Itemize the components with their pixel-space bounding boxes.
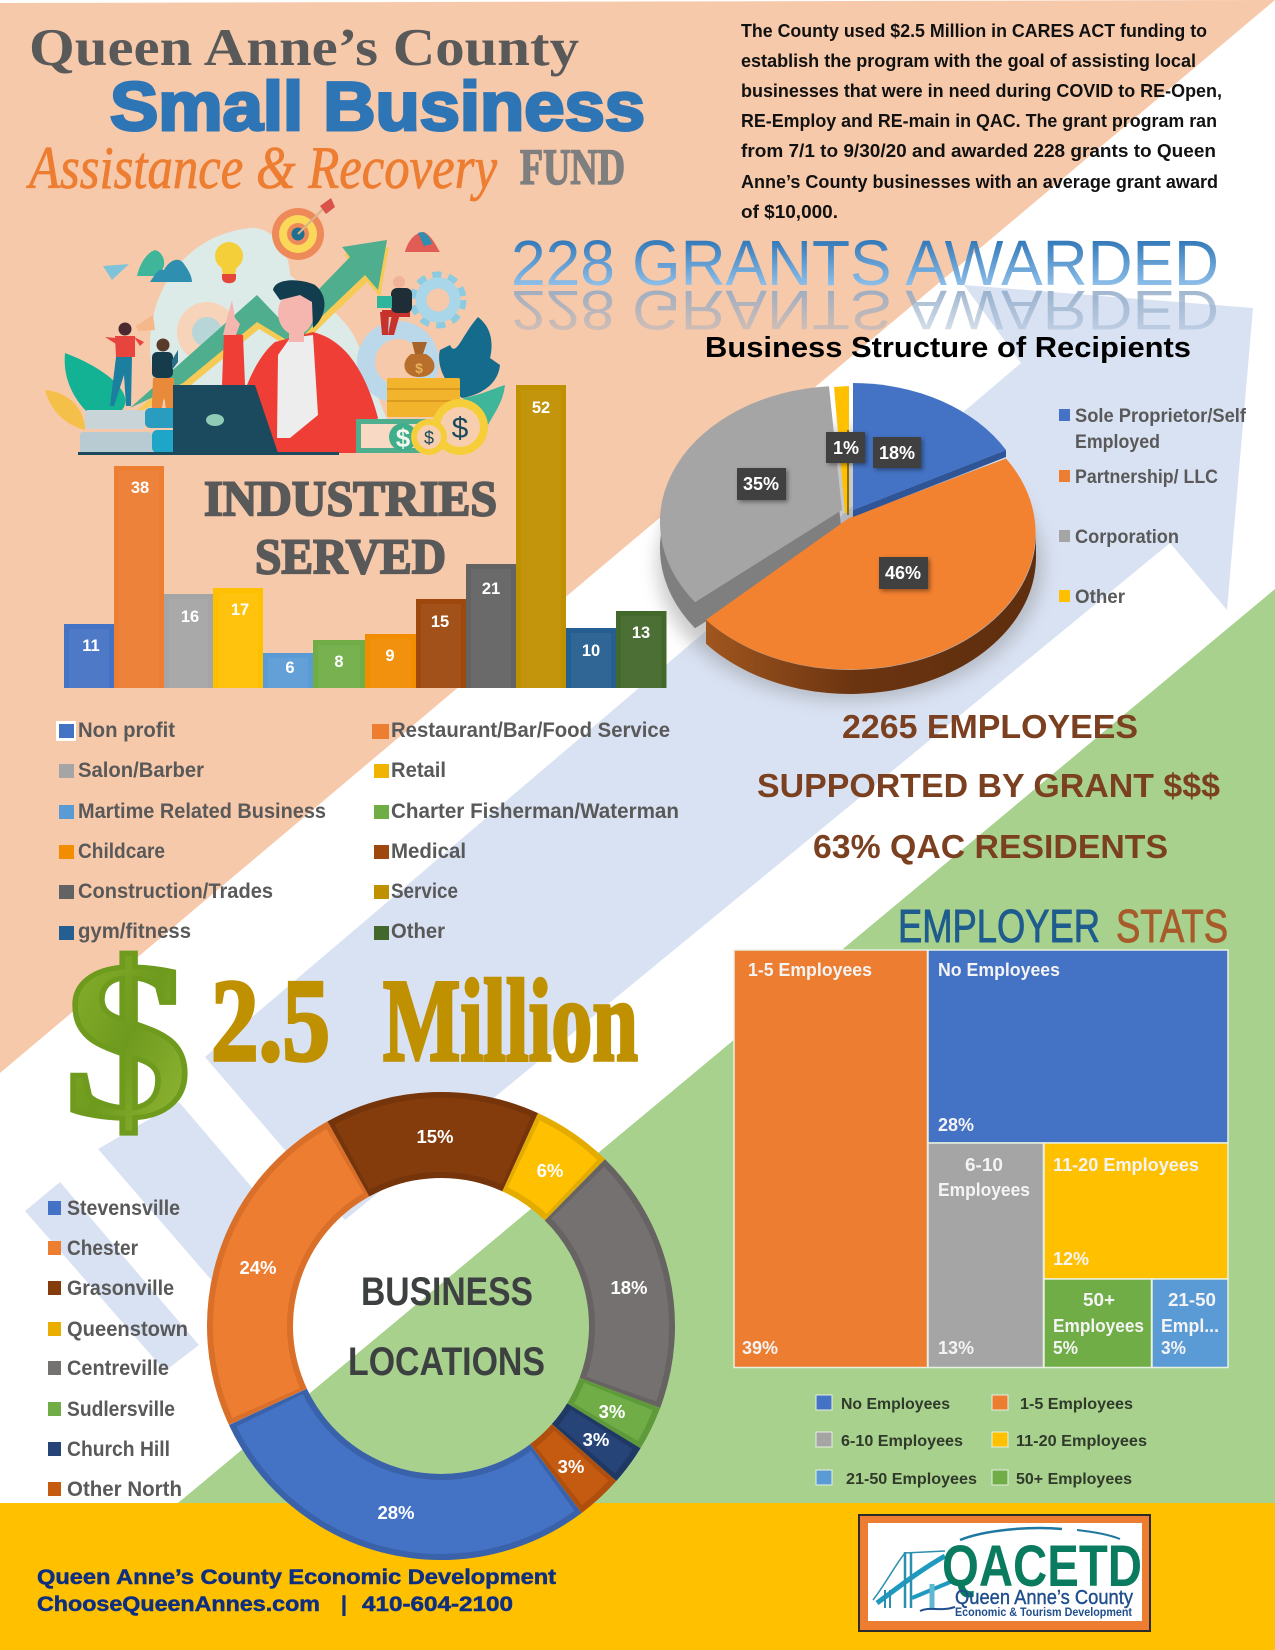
2.5 million figure: 2.5	[211, 955, 330, 1086]
bar: medical 15: 15	[431, 613, 449, 631]
industries legend: Construction/Trades	[78, 880, 273, 903]
treemap labels: 3%	[1161, 1338, 1186, 1358]
pie legend: Other	[1075, 586, 1125, 608]
pie labels: 18%	[879, 443, 915, 463]
locations legend: Other North	[67, 1478, 182, 1501]
treemap: employer stats	[734, 950, 1228, 1368]
bar: restaurant 38: 38	[131, 479, 149, 497]
bar: gym 10: 10	[582, 642, 600, 660]
growth arrow	[130, 240, 389, 415]
title: FUND	[520, 140, 625, 196]
locations legend: Chester	[67, 1237, 138, 1260]
industries served heading: SERVED	[255, 528, 446, 584]
intro paragraph: businesses that were in need during COVID to RE-Open,	[741, 80, 1222, 101]
logo: QACETD: Economic & Tourism Development	[955, 1605, 1132, 1619]
bar: childcare 9: 9	[385, 647, 395, 665]
laptop	[173, 385, 278, 453]
treemap legend: 21-50 Employees	[846, 1471, 977, 1488]
pie chart: business structure	[658, 383, 1042, 700]
bar: retail 17: 17	[231, 601, 249, 619]
central man	[222, 280, 378, 453]
bar: salon 16	[164, 594, 213, 688]
treemap labels: Employees	[1053, 1316, 1144, 1336]
industries legend: Other	[391, 920, 445, 943]
employee stats: 63% QAC RESIDENTS	[813, 829, 1168, 866]
logo: QACETD: QACETD	[942, 1534, 1142, 1599]
icon: green dollar sign: $	[64, 915, 192, 1165]
donut value labels: 6%	[537, 1160, 563, 1181]
228 grants awarded heading	[511, 227, 1219, 341]
donut value labels: 3%	[583, 1429, 609, 1450]
target	[272, 198, 335, 260]
industries legend: Non profit	[78, 719, 175, 742]
treemap labels: 21-50	[1168, 1290, 1216, 1310]
industries legend: Retail	[391, 759, 446, 782]
2.5 million figure: Million	[383, 955, 638, 1086]
faint gear in blob	[177, 302, 237, 362]
world blob	[150, 228, 387, 420]
locations legend: Church Hill	[67, 1438, 170, 1461]
bar: retail 17	[213, 588, 263, 688]
icon: bridge	[873, 1528, 1120, 1611]
coin stack	[387, 378, 460, 417]
left leaves	[45, 353, 125, 430]
bar: gym 10	[566, 628, 616, 688]
locations legend: Sudlersville	[67, 1398, 175, 1421]
intro paragraph: of $10,000.	[741, 201, 838, 222]
industries served heading: INDUSTRIES	[204, 470, 497, 526]
title: Small Business	[110, 68, 645, 145]
intro paragraph: from 7/1 to 9/30/20 and awarded 228 grants to Queen	[741, 140, 1216, 161]
locations legend: Queenstown	[67, 1318, 188, 1341]
footer contact text: Queen Anne’s County Economic Development	[37, 1566, 556, 1589]
slice: Stevensville 28%	[174, 1059, 708, 1593]
pie labels	[737, 432, 928, 589]
bar: maritime 6	[263, 653, 313, 688]
title: Assistance & Recovery	[26, 135, 497, 201]
light bulb	[215, 242, 243, 283]
bar: charter 8: 8	[334, 653, 344, 671]
donut centre heading: LOCATIONS	[348, 1340, 545, 1384]
pie legend: Sole Proprietor/Self	[1075, 405, 1246, 427]
man with orange trousers	[151, 338, 178, 428]
treemap labels: 13%	[938, 1338, 974, 1358]
locations legend: Stevensville	[67, 1197, 180, 1220]
donut value labels	[239, 1126, 648, 1523]
slice: sole proprietor 18%	[853, 383, 1006, 517]
bar: charter 8	[313, 640, 365, 688]
industries legend	[56, 719, 679, 943]
treemap labels: 1-5 Employees	[748, 960, 872, 980]
treemap legend: 50+ Employees	[1016, 1471, 1132, 1488]
intro paragraph: The County used $2.5 Million in CARES ACT funding to	[741, 20, 1207, 41]
industries legend: gym/fitness	[78, 920, 191, 943]
illustration: business growth scene	[45, 198, 505, 455]
treemap labels: 28%	[938, 1115, 974, 1135]
bar: construction 21: 21	[482, 580, 500, 598]
pie labels: 35%	[743, 474, 779, 494]
footer contact text	[37, 1566, 556, 1616]
donut value labels: 24%	[239, 1257, 277, 1278]
industries served heading	[204, 470, 497, 584]
treemap legend: 11-20 Employees	[1016, 1433, 1147, 1450]
donut value labels: 3%	[599, 1401, 625, 1422]
donut value labels: 18%	[610, 1277, 648, 1298]
228 grants awarded heading: 228 GRANTS AWARDED	[511, 279, 1219, 341]
bar: salon 16: 16	[181, 608, 199, 626]
money bag	[404, 342, 434, 377]
donut value labels: 3%	[558, 1456, 584, 1477]
logo: QACETD: Queen Anne’s County	[955, 1587, 1133, 1609]
treemap labels: 11-20 Employees	[1053, 1155, 1199, 1175]
coins: $	[452, 412, 469, 445]
treemap legend	[816, 1395, 1147, 1488]
treemap labels: 6-10	[965, 1155, 1003, 1175]
intro paragraph: RE-Employ and RE-main in QAC. The grant program ran	[741, 110, 1217, 131]
locations legend	[48, 1197, 188, 1501]
slice: Other North 3%	[171, 1056, 711, 1596]
donut value labels: 15%	[416, 1126, 454, 1147]
employee stats: SUPPORTED BY GRANT $$$	[757, 768, 1220, 805]
clouds and paper plane	[103, 250, 192, 282]
industries legend: Service	[391, 880, 458, 903]
pie legend: Employed	[1075, 431, 1160, 453]
bar: construction 21	[466, 564, 516, 688]
slice: corporation 35%	[660, 386, 842, 628]
slice: Grasonville 15%	[181, 1066, 701, 1586]
coins	[411, 399, 488, 455]
title	[26, 19, 645, 201]
title: Queen Anne’s County	[29, 19, 579, 77]
locations legend: Grasonville	[67, 1277, 174, 1300]
bar: medical 15	[416, 599, 466, 688]
employee stats: 2265 EMPLOYEES	[842, 709, 1138, 746]
bar: other 13	[616, 611, 666, 688]
footer contact text: ChooseQueenAnnes.com	[37, 1593, 320, 1616]
bar: service 52: 52	[532, 399, 550, 417]
treemap labels	[742, 960, 1219, 1358]
pie legend	[1059, 405, 1246, 608]
industries legend: Restaurant/Bar/Food Service	[391, 719, 670, 742]
pie legend: Corporation	[1075, 526, 1179, 548]
bar: service 52	[516, 385, 566, 688]
right leaves	[439, 317, 505, 425]
treemap labels: 39%	[742, 1338, 778, 1358]
228 grants awarded heading: 228 GRANTS AWARDED	[511, 227, 1219, 299]
woman with megaphone	[105, 315, 155, 406]
slice: other 1%	[834, 386, 849, 515]
money bag: $	[415, 360, 423, 376]
treemap legend: 1-5 Employees	[1020, 1396, 1133, 1413]
treemap labels: 12%	[1053, 1249, 1089, 1269]
treemap labels: Empl...	[1161, 1316, 1219, 1336]
business structure heading: Business Structure of Recipients	[705, 332, 1191, 364]
bar: childcare 9	[365, 634, 416, 688]
footer contact text: 410-604-2100	[362, 1593, 513, 1616]
slice: Centreville 18%	[171, 1056, 711, 1596]
industries legend: Salon/Barber	[78, 759, 204, 782]
donut centre heading: BUSINESS	[361, 1270, 533, 1314]
small mountains	[405, 232, 440, 252]
bar: non profit 11: 11	[82, 637, 100, 655]
industries legend: Martime Related Business	[78, 800, 326, 823]
donut chart: business locations	[171, 1056, 711, 1596]
locations legend: Centreville	[67, 1357, 169, 1380]
bar: maritime 6: 6	[285, 659, 295, 677]
coins: $	[424, 428, 434, 448]
treemap legend: No Employees	[841, 1396, 950, 1413]
intro paragraph	[741, 20, 1222, 222]
banknote	[356, 419, 426, 453]
employer stats heading: STATS	[1116, 900, 1228, 952]
treemap labels: Employees	[938, 1180, 1030, 1200]
treemap legend: 6-10 Employees	[841, 1433, 963, 1450]
logo: QACETD	[859, 1515, 1150, 1631]
footer contact text: |	[341, 1593, 347, 1616]
treemap labels: 50+	[1083, 1290, 1115, 1310]
bar chart: industries served	[64, 385, 666, 688]
bar: other 13: 13	[632, 624, 650, 642]
bar: non profit 11	[64, 624, 114, 688]
seated man with laptop	[377, 276, 412, 335]
treemap labels: 5%	[1053, 1338, 1078, 1358]
donut centre heading	[348, 1270, 545, 1384]
donut value labels: 28%	[377, 1502, 415, 1523]
slice: Sudlersville 3%	[195, 1080, 687, 1572]
employee stats	[757, 709, 1220, 866]
treemap labels: No Employees	[938, 960, 1060, 980]
intro paragraph: establish the program with the goal of assisting local	[741, 50, 1196, 71]
2.5 million figure	[211, 955, 638, 1086]
bar: restaurant 38	[114, 466, 164, 688]
slice: Queenstown 6%	[188, 1073, 694, 1579]
industries legend: Childcare	[78, 840, 165, 863]
footer band	[0, 1503, 1275, 1650]
pie legend: Partnership/ LLC	[1075, 466, 1218, 488]
gears	[366, 275, 463, 394]
slice: partnership 46%	[706, 458, 1036, 694]
employer stats heading: EMPLOYER	[898, 900, 1100, 952]
industries legend: Charter Fisherman/Waterman	[391, 800, 679, 823]
books	[80, 408, 198, 453]
pie labels: 1%	[833, 438, 859, 458]
ground line	[78, 452, 339, 455]
pie labels: 46%	[885, 563, 921, 583]
intro paragraph: Anne’s County businesses with an average grant award	[741, 171, 1218, 192]
banknote: $	[396, 423, 411, 453]
slice: Chester 24%	[187, 1072, 695, 1580]
industries legend: Medical	[391, 840, 466, 863]
slice: Church Hill 3%	[178, 1063, 704, 1589]
